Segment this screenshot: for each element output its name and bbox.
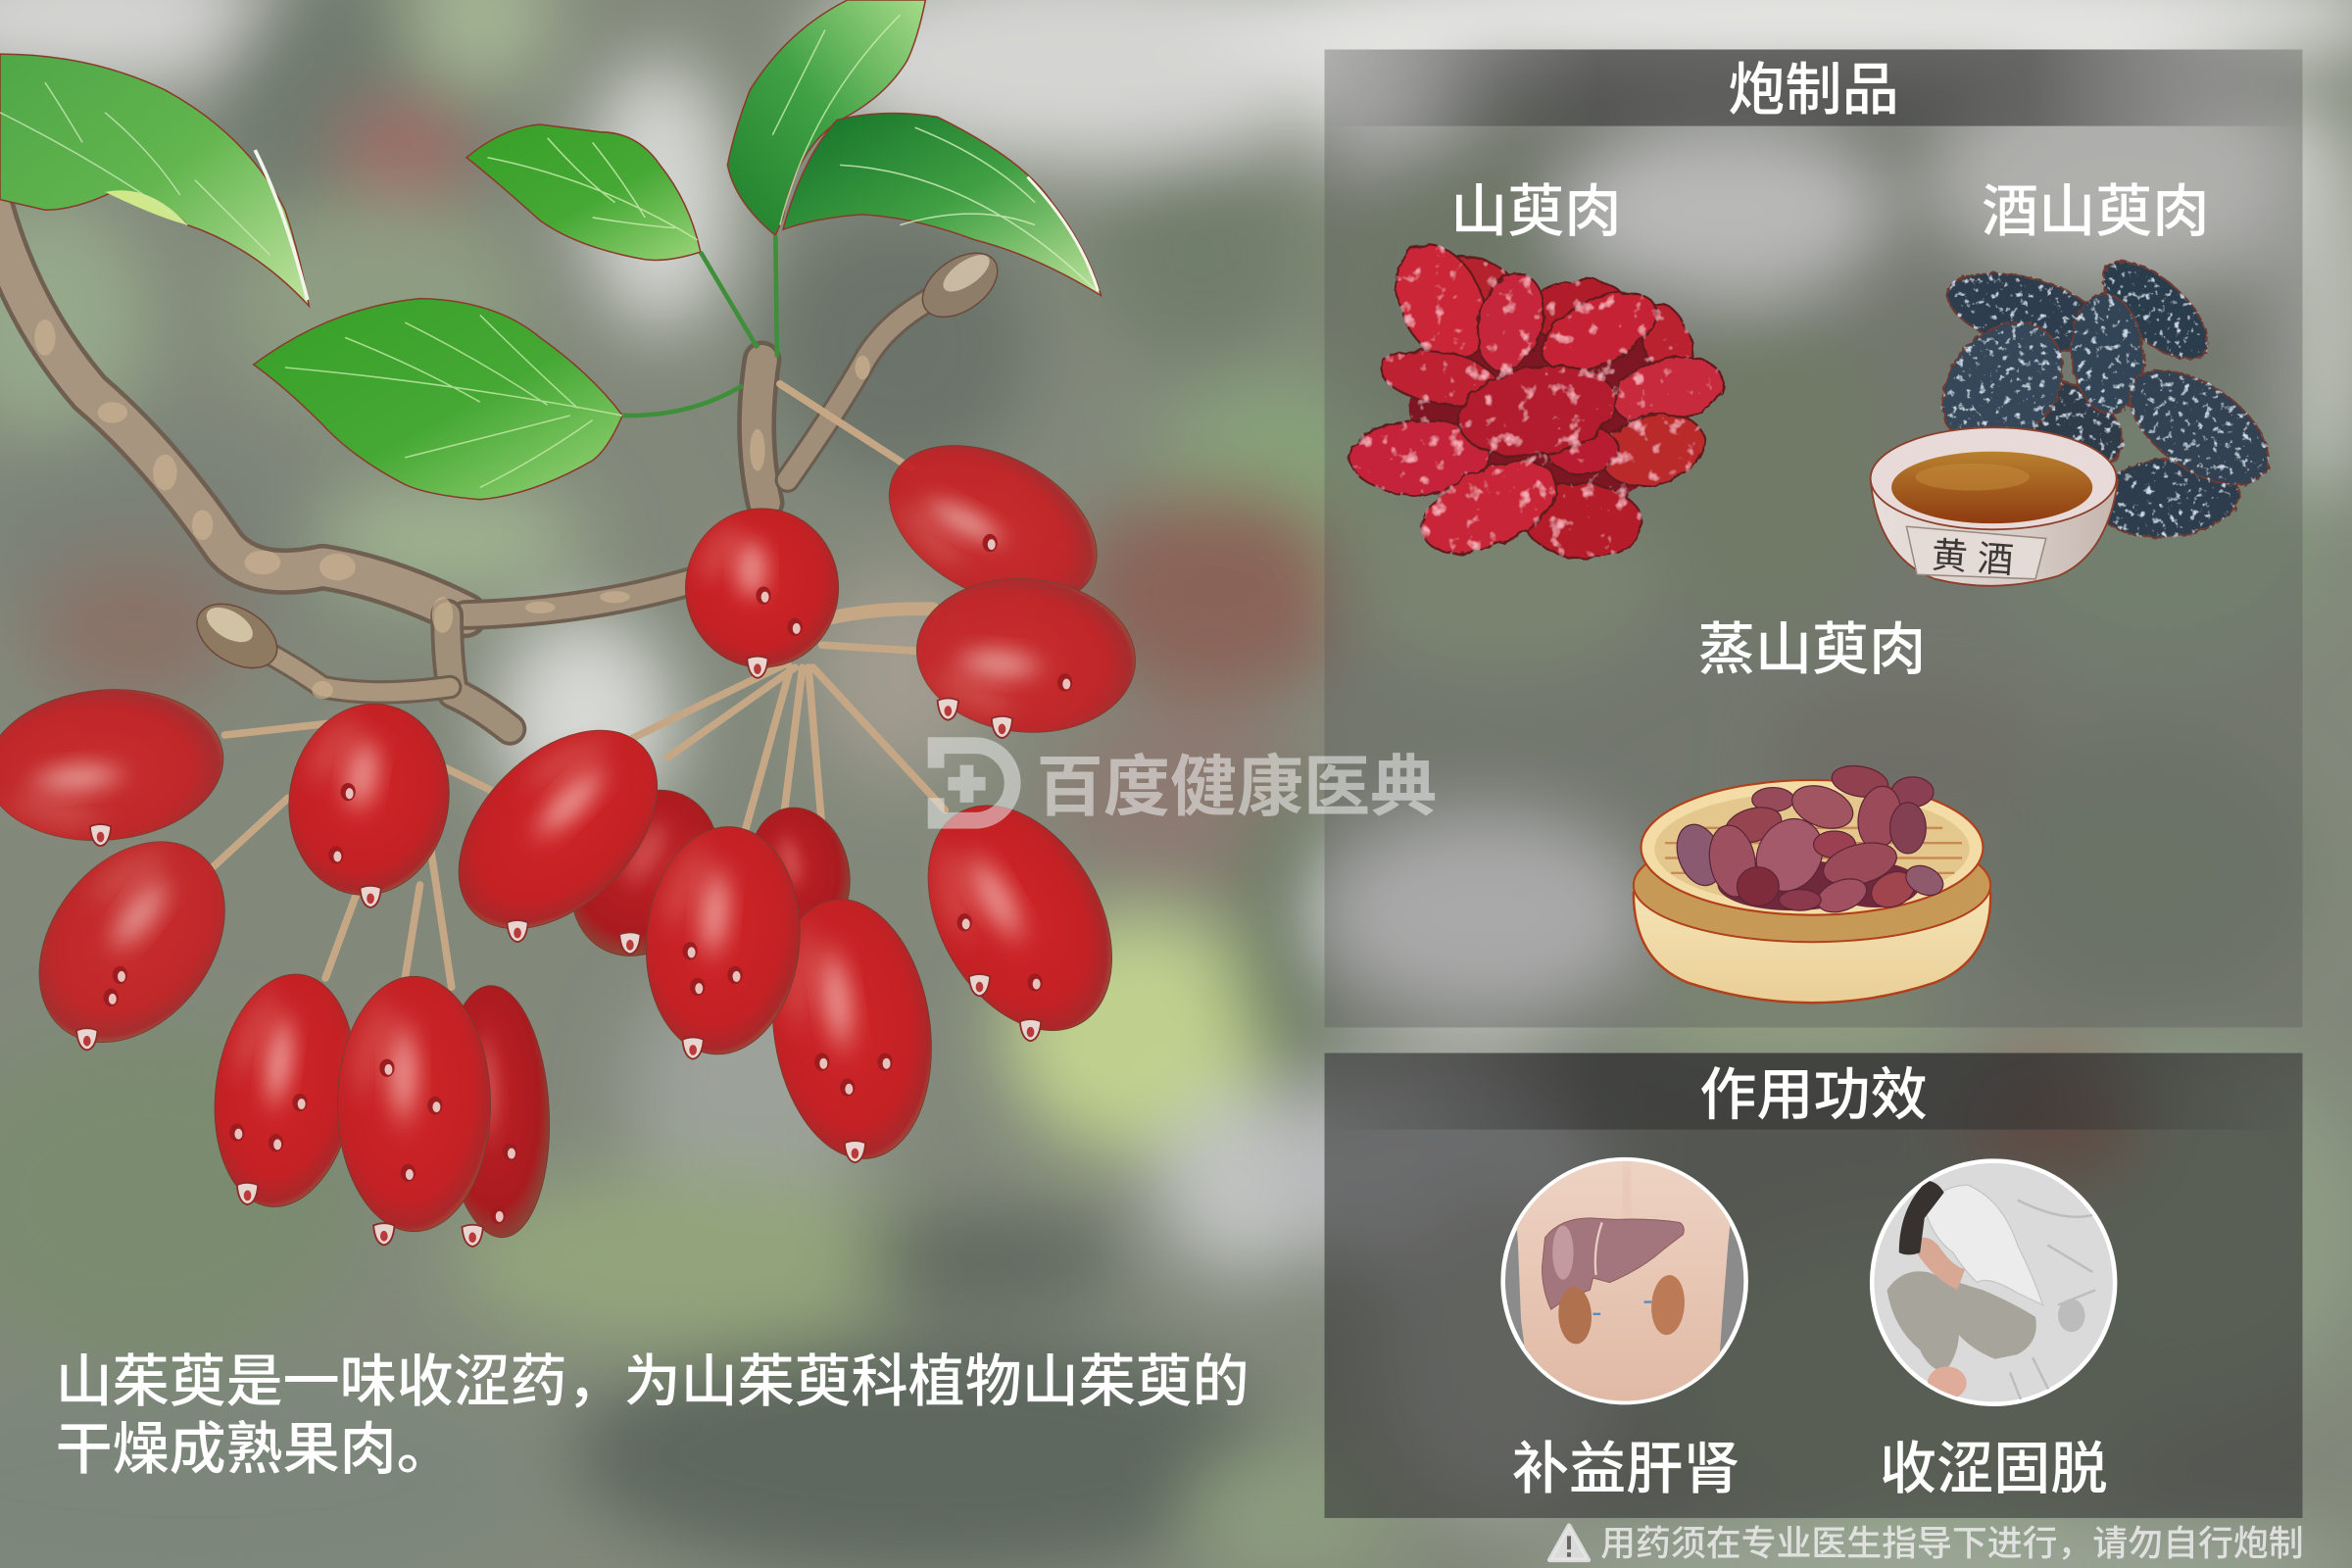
branch bark highlights: [34, 319, 870, 699]
panel: 作用功效: [1325, 1053, 2302, 1518]
berry: top centre: [685, 509, 839, 667]
heading: 炮制品: 炮制品: [1728, 59, 1899, 122]
watermark logo: [936, 746, 1437, 825]
panel background: [1325, 50, 2302, 1027]
warning mark: [1568, 1536, 1570, 1557]
leaf 2: [254, 299, 622, 500]
leaf 5: [783, 113, 1101, 296]
berries: centre cluster: [421, 693, 1150, 1169]
label: 蒸山萸肉: 蒸山萸肉: [1698, 618, 1926, 682]
water droplets: [76, 534, 1072, 1247]
warning icon: [1549, 1526, 1589, 1560]
bud: lower: [186, 591, 288, 681]
panel header bar: [1325, 50, 2302, 126]
label: 收涩固脱: 收涩固脱: [1880, 1437, 2107, 1500]
berries: upper right: [862, 414, 1142, 741]
heading: 作用功效: 作用功效: [1699, 1063, 1928, 1127]
berries: far left pair: [0, 680, 263, 1078]
illustration: wine-processed dark flesh pile: [1918, 245, 2288, 543]
label: 酒山萸肉: 酒山萸肉: [1982, 180, 2210, 244]
panel: 炮制品: [1325, 50, 2302, 1027]
berry: left centre: [274, 691, 464, 907]
leaf 3: [466, 124, 701, 260]
plant illustration: [0, 0, 1150, 1247]
illustration: steamer with steamed flesh: [1634, 761, 1990, 1003]
watermark text: 百度健康医典: [1037, 751, 1437, 825]
leaf 1: [0, 54, 309, 306]
description text: 山茱萸是一味收涩药，为山茱萸科植物山茱萸的: [56, 1350, 1250, 1414]
illustration: red dogwood flesh pile: [1350, 230, 1730, 571]
berries: bottom trio: [200, 965, 556, 1240]
label: 山萸肉: 山萸肉: [1450, 180, 1622, 244]
illustration: yellow wine bowl: [1871, 427, 2118, 586]
leaf 4: [727, 0, 925, 235]
panel header bar: [1325, 1053, 2302, 1130]
description text: [56, 1350, 1250, 1481]
panel background: [1325, 1053, 2302, 1518]
branches: [0, 210, 938, 729]
leaf stems: [622, 235, 777, 416]
bowl label: 黄 酒: 黄 酒: [1931, 535, 2015, 581]
warning text: 用药须在专业医生指导下进行，请勿自行炮制: [1600, 1524, 2304, 1563]
icon: curled-up man on bed: [1872, 1161, 2115, 1404]
icon: back with liver and kidneys: [1503, 1155, 1746, 1410]
description text: 干燥成熟果肉。: [56, 1417, 454, 1481]
fruit stalks: [213, 384, 945, 987]
label: 补益肝肾: 补益肝肾: [1512, 1437, 1740, 1500]
bud: upper: [911, 240, 1009, 330]
